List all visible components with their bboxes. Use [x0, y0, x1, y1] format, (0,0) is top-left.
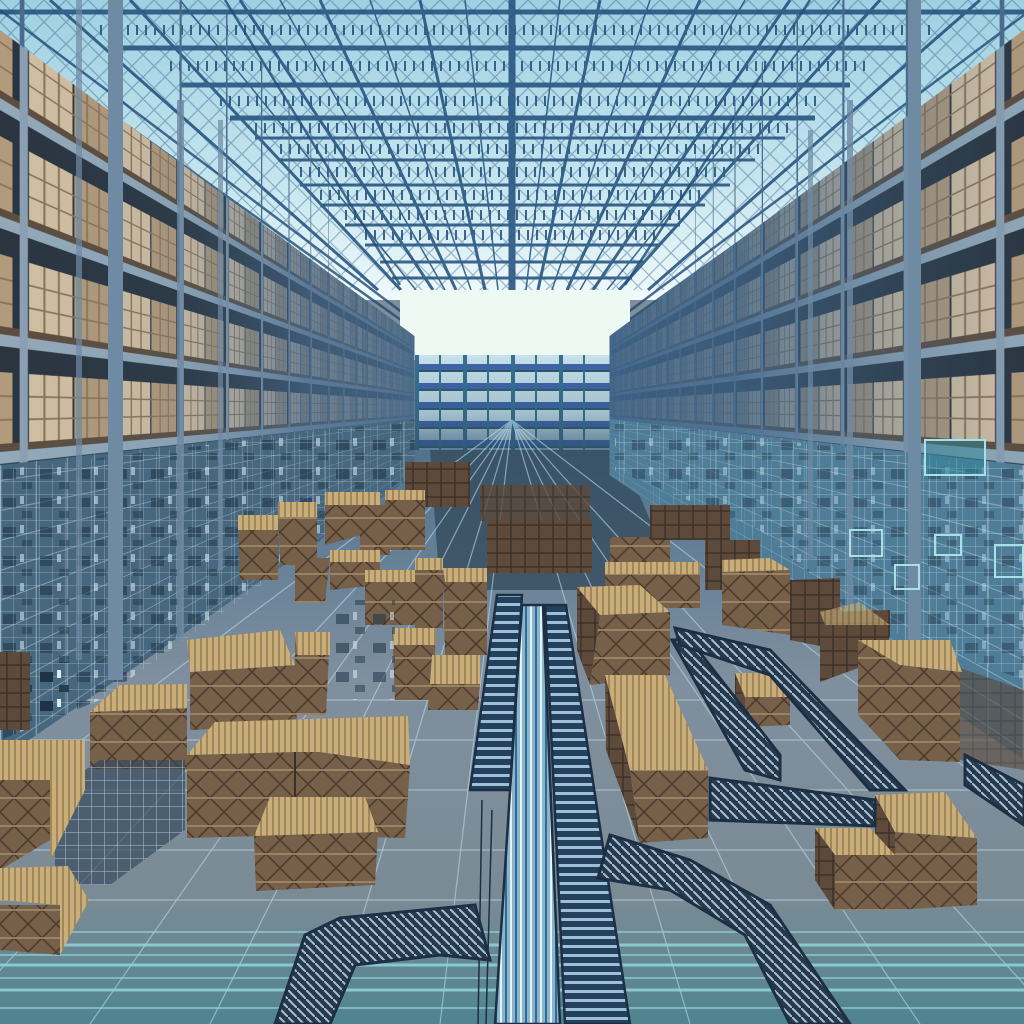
right rack wall	[610, 0, 1024, 760]
far left crates	[0, 740, 89, 955]
central conveyors	[470, 595, 630, 1024]
left wall clutter	[0, 420, 415, 740]
large double crate	[187, 716, 410, 838]
holographic panels	[850, 440, 1023, 589]
steel columns	[76, 0, 921, 680]
left crates	[90, 630, 297, 770]
wire cage at left	[55, 760, 185, 885]
left wall mesh	[0, 420, 415, 740]
foreground crate	[254, 797, 378, 891]
ceiling	[0, 0, 1024, 330]
right wall clutter	[615, 420, 1024, 680]
back wall racks	[415, 355, 615, 455]
right crate block	[858, 640, 1024, 770]
mid right crate stacks	[722, 558, 890, 682]
floor grid lines	[0, 420, 1024, 1024]
right wall mesh	[615, 420, 1024, 680]
curved conveyor lower left	[275, 905, 490, 1024]
left rack wall	[0, 0, 414, 740]
upper left crate cluster	[238, 490, 425, 603]
back wall glow	[400, 290, 630, 360]
dark far floor pile	[430, 450, 680, 590]
long crate	[605, 675, 708, 843]
small mid crate	[735, 673, 790, 727]
curved conveyor lower right	[598, 835, 850, 1024]
far crate piles	[405, 462, 760, 608]
center left crate cluster	[295, 558, 487, 715]
lower right crates	[815, 792, 977, 910]
center pallet stack	[577, 585, 670, 685]
right conveyors	[672, 628, 1024, 826]
teal floor rails	[0, 932, 1024, 1008]
far left shelf unit	[0, 652, 72, 730]
floor	[0, 450, 1024, 1024]
